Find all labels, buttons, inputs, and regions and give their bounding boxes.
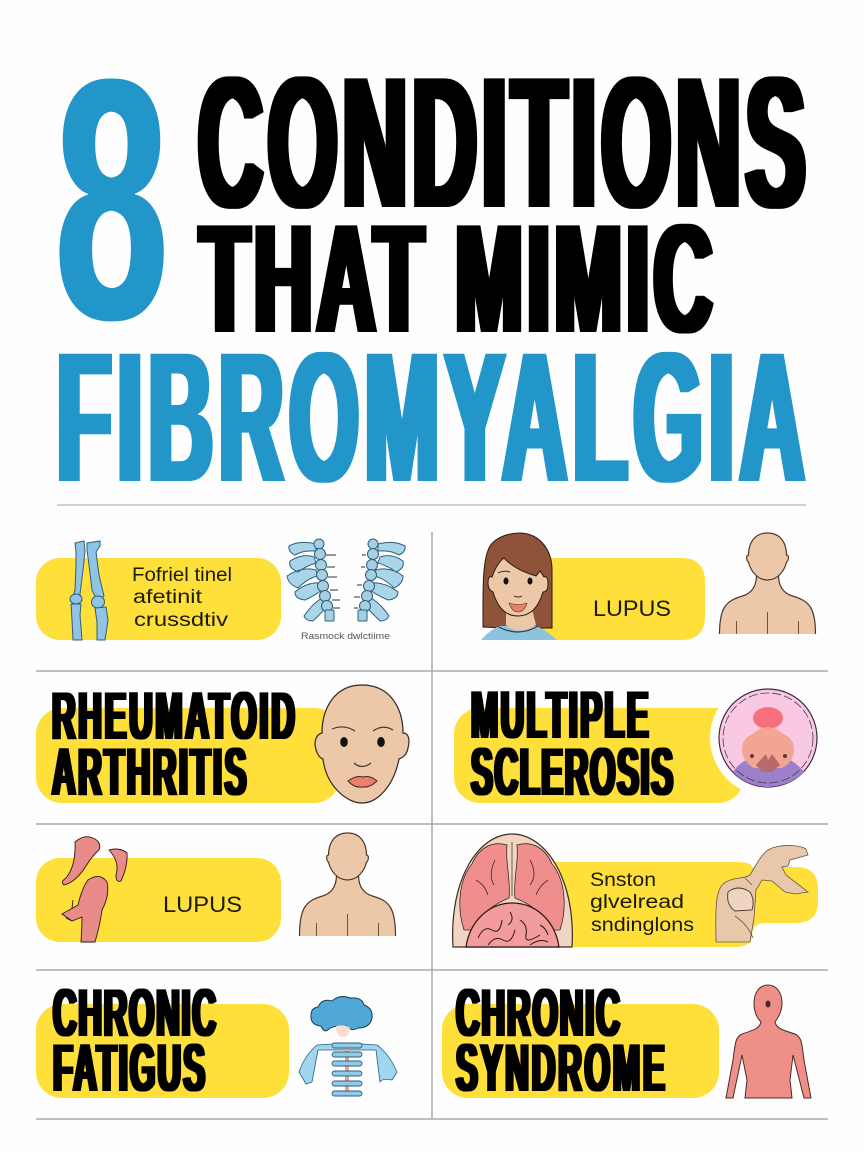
icon: woman portrait [481,533,557,640]
yellow label pill [36,858,281,942]
panel: multiple sclerosis [454,678,826,810]
yellow label pill [530,862,818,947]
heading: chronic fatigus [53,976,218,1106]
icon: inflamed organs [62,837,127,942]
panel: chronic fatigue [36,976,397,1106]
heading: multiple sclerosis [471,678,675,810]
icon: twisted hand [716,845,808,942]
text: panel description: afetinit [133,587,203,608]
text: spine caption: Rasmock dwlctiime [301,631,390,641]
heading: rheumatoid arthritis: ARTHRITIS [52,735,249,810]
panel: bones and joints [36,539,405,641]
text: panel description: crussdtiv [134,610,229,631]
text: panel description [590,870,694,936]
yellow label pill [36,708,340,803]
panel: chronic syndrome [442,976,811,1106]
yellow label pill [36,558,281,640]
icon: leg bones [70,541,108,640]
panel: brain and hand [453,834,818,947]
text: panel description [132,565,232,631]
heading: multiple sclerosis: MULTIPLE [471,678,651,753]
text: panel description: Snston [590,870,656,891]
title line: conditions: CONDITIONS [198,39,810,248]
icon: red human figure [726,985,811,1098]
text: lupus: LUPUS [163,892,242,917]
panel: rheumatoid arthritis [36,679,409,810]
yellow label pill [442,1004,719,1098]
heading: rheumatoid arthritis: RHEUMATOID [52,679,298,754]
icon: medallion head [719,689,817,787]
text: lupus: LUPUS [593,596,671,621]
panel: lupus organs [36,833,396,942]
heading: chronic fatigus: FATIGUS [53,1031,207,1106]
yellow label pill [36,1004,289,1098]
heading: chronic syndrome [456,976,668,1106]
icon: spine left [287,539,340,621]
icon: spine right [354,539,405,621]
icon: bust outline [300,833,396,936]
heading: chronic syndrome: SYNDROME [456,1031,668,1106]
icon: brain cross-section [453,834,572,947]
heading: multiple sclerosis: SCLEROSIS [471,735,675,810]
title numeral 8: 8 [55,7,168,391]
heading: chronic syndrome: CHRONIC [456,976,622,1051]
text: panel description: sndinglons [591,915,694,936]
title [55,7,811,521]
title line: fibromyalgia: FIBROMYALGIA [57,314,811,521]
icon: bald face [315,685,409,803]
heading: rheumatoid arthritis [52,679,298,810]
text: panel description: glvelread [590,892,684,913]
title line: that mimic: THAT MIMIC [200,193,717,366]
text: panel description: Fofriel tinel [132,565,232,586]
heading: chronic fatigus: CHRONIC [53,976,218,1051]
yellow label pill [454,708,744,803]
yellow label pill [540,558,705,640]
icon: bust outline [720,533,816,634]
panel: lupus woman [481,533,816,640]
icon: brain cloud and spine [299,997,397,1096]
